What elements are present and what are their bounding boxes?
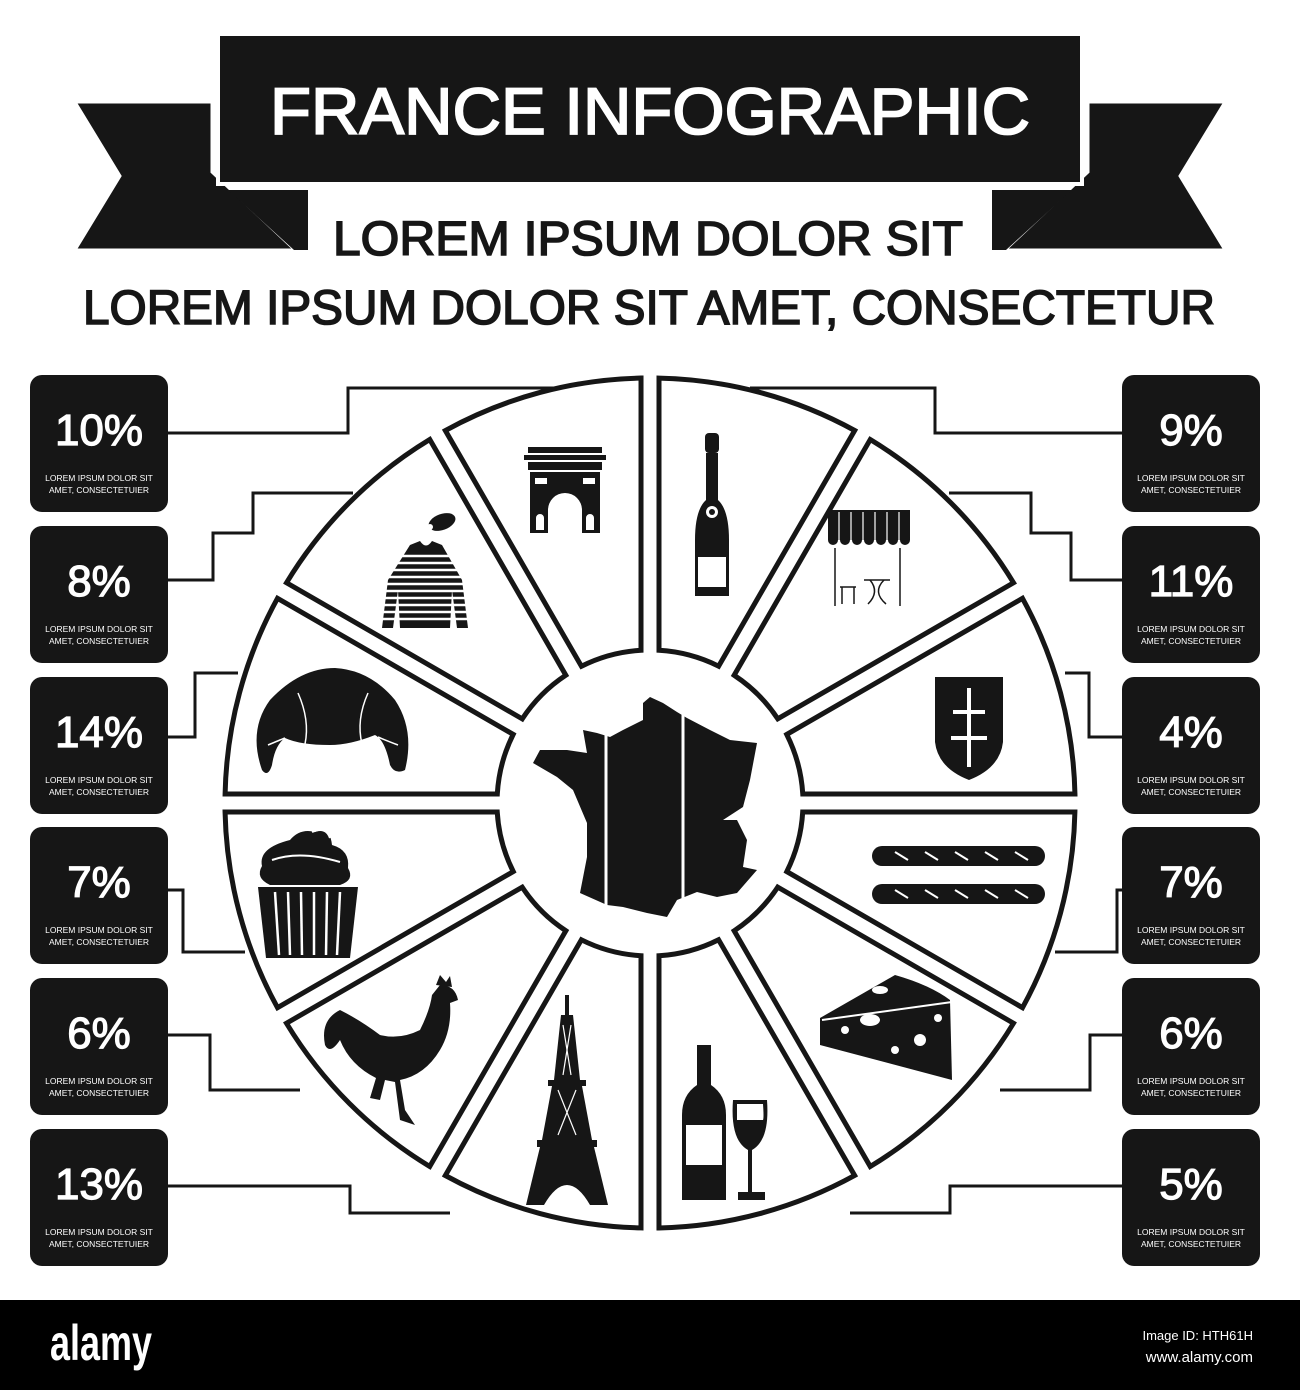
stat: 7% left (30, 827, 168, 964)
title banner (75, 34, 1225, 250)
icon: champagne bottle (695, 433, 729, 596)
stat: 4%: AMET, CONSECTETUIER (1141, 787, 1241, 797)
stat: 6% right: 6% (1159, 1009, 1223, 1058)
subtitle 1: LOREM IPSUM DOLOR SIT (333, 213, 963, 266)
stat: 14%: AMET, CONSECTETUIER (49, 787, 149, 797)
stat: 8%: 8% (67, 557, 131, 606)
icon: shield with cross (935, 677, 1003, 780)
stat: 10%: AMET, CONSECTETUIER (49, 485, 149, 495)
ribbon right (992, 102, 1225, 250)
stat: 7% right (1122, 827, 1260, 964)
stat: 5% (1122, 1129, 1260, 1266)
footer id text: Image ID: HTH61H (1142, 1328, 1253, 1343)
footer logo: alamy (50, 1315, 152, 1371)
icon: baguettes (872, 846, 1045, 904)
icon: rooster (324, 975, 458, 1125)
stat: 4%: 4% (1159, 708, 1223, 757)
subtitle 2: LOREM IPSUM DOLOR SIT AMET, CONSECTETUR (83, 282, 1215, 335)
stat: 11% (1122, 526, 1260, 663)
banner band (218, 34, 1082, 184)
stat: 6% left: AMET, CONSECTETUIER (49, 1088, 149, 1098)
icon: cupcake (258, 830, 358, 958)
stat: 6% left: LOREM IPSUM DOLOR SIT (45, 1076, 153, 1086)
stat: 6% right: LOREM IPSUM DOLOR SIT (1137, 1076, 1245, 1086)
stat: 6% right (1122, 978, 1260, 1115)
icon: cheese (820, 975, 952, 1080)
footer id text: www.alamy.com (1145, 1349, 1253, 1366)
icon: wine bottle and glass (682, 1045, 767, 1200)
icon: striped sweater and beret (380, 510, 470, 628)
icon: cafe awning (828, 510, 910, 606)
footer id text (1142, 1328, 1253, 1366)
icon: map of France (533, 697, 757, 917)
stat: 7% right: 7% (1159, 858, 1223, 907)
stat: 11%: 11% (1149, 557, 1233, 606)
icon: croissant (257, 668, 408, 773)
stat: 8%: LOREM IPSUM DOLOR SIT (45, 624, 153, 634)
connector lines (168, 388, 1122, 1213)
stat: 5%: LOREM IPSUM DOLOR SIT (1137, 1227, 1245, 1237)
stat: 9%: AMET, CONSECTETUIER (1141, 485, 1241, 495)
stat: 6% right: AMET, CONSECTETUIER (1141, 1088, 1241, 1098)
stat: 11%: LOREM IPSUM DOLOR SIT (1137, 624, 1245, 634)
stat: 7% right: AMET, CONSECTETUIER (1141, 937, 1241, 947)
stat: 14%: LOREM IPSUM DOLOR SIT (45, 775, 153, 785)
stat: 6% left (30, 978, 168, 1115)
stat: 13% (30, 1129, 168, 1266)
stat: 13%: LOREM IPSUM DOLOR SIT (45, 1227, 153, 1237)
stat: 7% left: LOREM IPSUM DOLOR SIT (45, 925, 153, 935)
icon: eiffel tower (526, 995, 608, 1205)
stat: 9%: LOREM IPSUM DOLOR SIT (1137, 473, 1245, 483)
stat: 4% (1122, 677, 1260, 814)
stat: 10% (30, 375, 168, 512)
ribbon left (75, 102, 308, 250)
stat: 9% (1122, 375, 1260, 512)
footer bar (0, 1300, 1300, 1390)
icon: arc de triomphe (524, 447, 606, 533)
stat boxes right (1122, 375, 1260, 1266)
stat: 5%: 5% (1159, 1160, 1223, 1209)
stat: 5%: AMET, CONSECTETUIER (1141, 1239, 1241, 1249)
stat: 13%: 13% (55, 1160, 143, 1209)
title: FRANCE INFOGRAPHIC (270, 74, 1030, 148)
stat: 7% left: 7% (67, 858, 131, 907)
stat: 6% left: 6% (67, 1009, 131, 1058)
stat: 13%: AMET, CONSECTETUIER (49, 1239, 149, 1249)
stat boxes left (30, 375, 168, 1266)
stat: 8% (30, 526, 168, 663)
stat: 10%: 10% (55, 406, 143, 455)
stat: 7% left: AMET, CONSECTETUIER (49, 937, 149, 947)
stat: 9%: 9% (1159, 406, 1223, 455)
stat: 8%: AMET, CONSECTETUIER (49, 636, 149, 646)
stat: 14% (30, 677, 168, 814)
wheel of 12 sectors (180, 333, 1120, 1273)
stat: 11%: AMET, CONSECTETUIER (1141, 636, 1241, 646)
stat: 10%: LOREM IPSUM DOLOR SIT (45, 473, 153, 483)
stat: 4%: LOREM IPSUM DOLOR SIT (1137, 775, 1245, 785)
stat: 7% right: LOREM IPSUM DOLOR SIT (1137, 925, 1245, 935)
stat: 14%: 14% (55, 708, 143, 757)
